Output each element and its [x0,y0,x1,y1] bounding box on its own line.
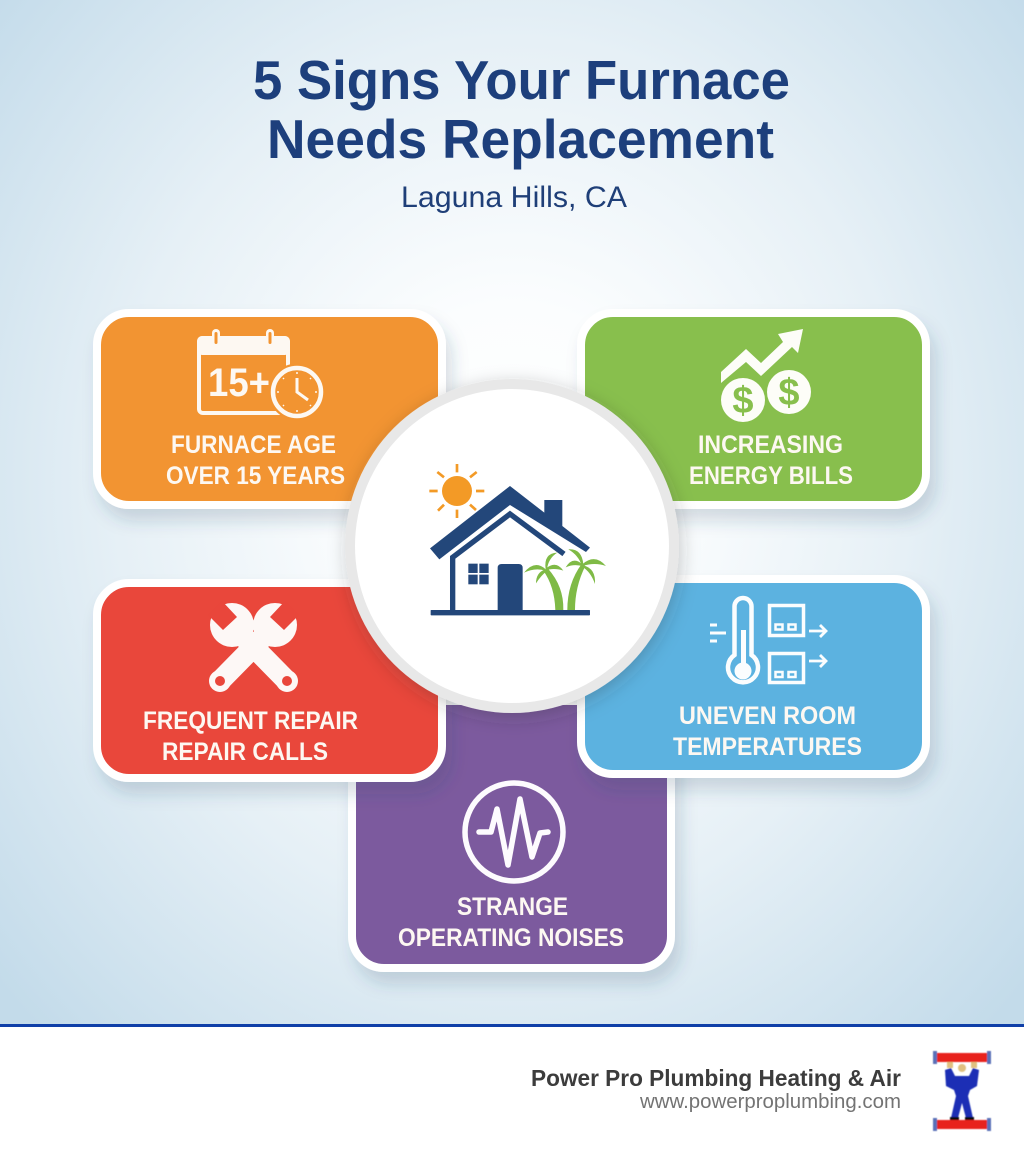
label: energy bills: INCREASING [698,431,843,459]
label: furnace age: OVER 15 YEARS [166,462,345,490]
icon: sound wave [465,783,563,881]
label: strange operating noises: OPERATING NOISES [398,924,624,952]
panel: furnace age over 15 years [97,313,442,505]
label: strange operating noises: STRANGE [457,893,568,921]
icon: rising arrow and coins [721,329,811,422]
label: frequent repair [143,707,358,766]
icon: thermometer and rooms [710,598,826,682]
icon: calendar and clock [197,329,326,420]
label: furnace age: FURNACE AGE [171,431,336,459]
icon: calendar and clock: 15+ [208,361,270,405]
logo: strongman lifting pipe [933,1051,991,1131]
icon: house with sun and palm trees [429,464,606,615]
label: uneven room temperatures: TEMPERATURES [673,733,862,761]
panel: strange operating noises [352,701,671,968]
label: furnace age [166,431,345,490]
label: energy bills: ENERGY BILLS [689,462,853,490]
label: uneven room temperatures [673,702,862,761]
footer [0,1024,1024,1154]
panel: frequent repair calls [97,583,442,778]
icon: rising arrow and coins: $ [778,372,800,414]
icon: sun [429,464,484,518]
title [253,49,790,170]
label: energy bills [689,431,853,490]
title: Needs Replacement [267,108,774,170]
center circle [345,379,679,713]
website: www.powerproplumbing.com [639,1091,901,1113]
icon: palm trees [524,549,606,610]
icon: crossed wrenches [208,601,299,692]
label: uneven room temperatures: UNEVEN ROOM [679,702,856,730]
panel: increasing energy bills [581,313,926,505]
company name: Power Pro Plumbing Heating & Air [531,1065,901,1091]
label: strange operating noises [398,893,624,952]
label: frequent repair: FREQUENT REPAIR [143,707,358,735]
panel: uneven room temperatures [581,579,926,774]
title: 5 Signs Your Furnace [253,49,790,111]
label: frequent repair: REPAIR CALLS [162,738,328,766]
subtitle: Laguna Hills, CA [401,181,627,214]
icon: rising arrow and coins: $ [732,380,754,422]
icon: house [430,486,590,615]
